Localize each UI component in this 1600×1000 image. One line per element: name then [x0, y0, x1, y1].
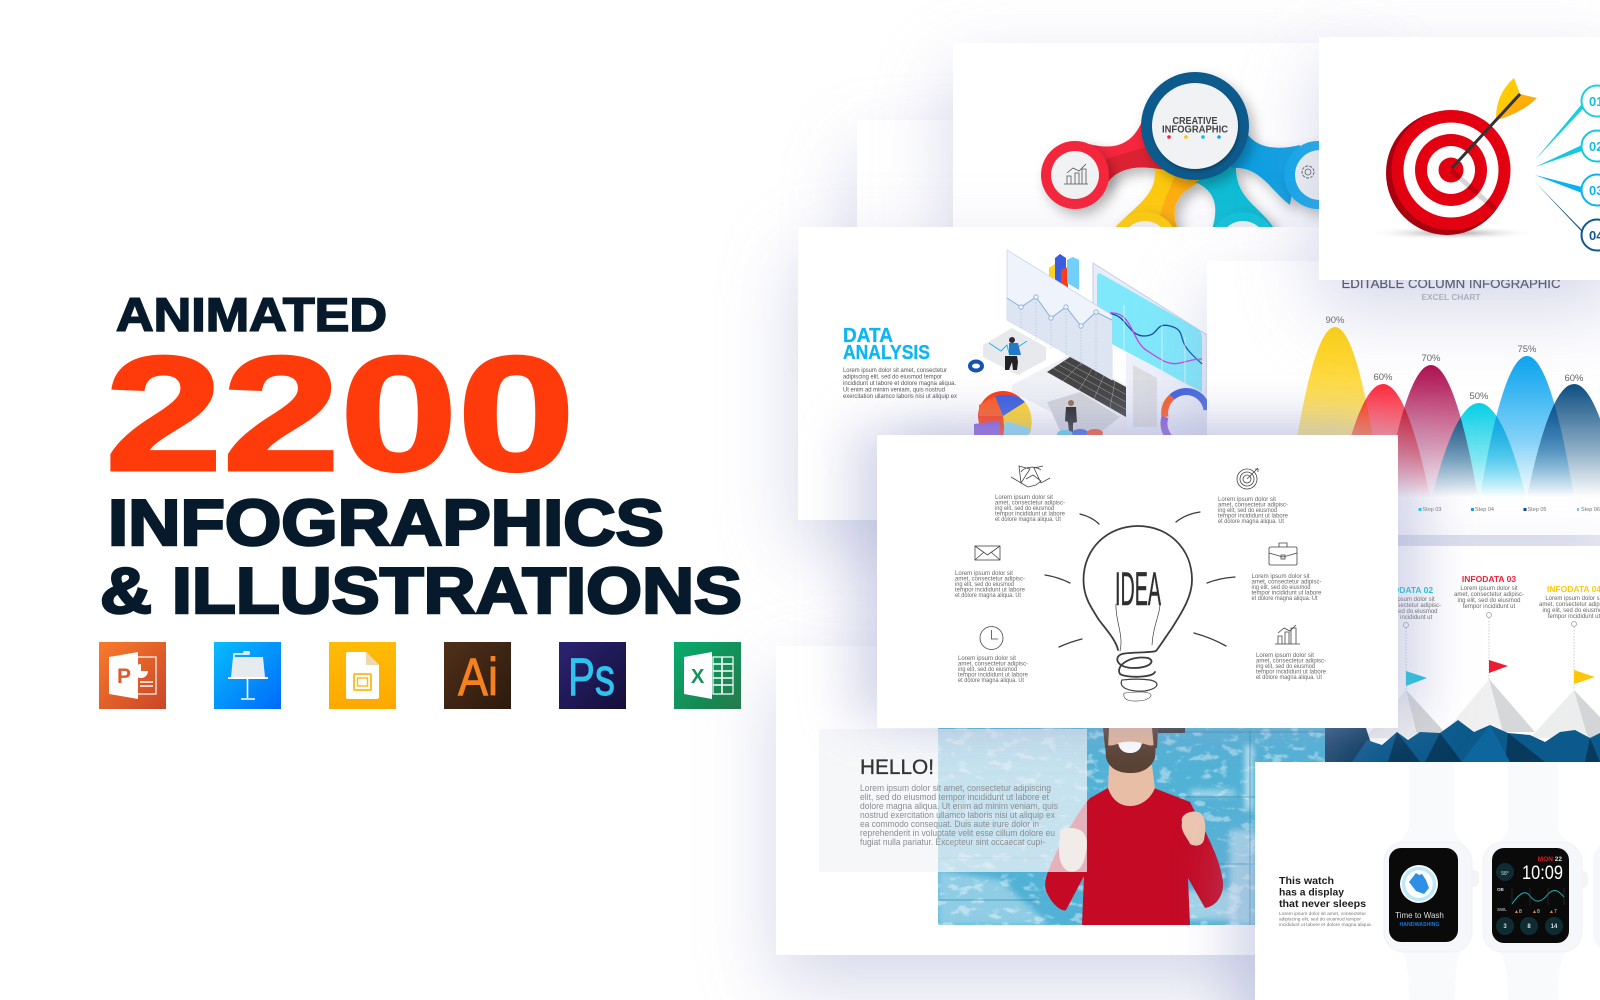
person on platform	[983, 328, 1046, 375]
percent labels	[1325, 315, 1584, 402]
text block: middle left: ing elit, sed do eiusmod	[955, 581, 1014, 588]
text block: middle right: Lorem ipsum dolor sit	[1252, 573, 1310, 580]
lobe: red chart	[1041, 141, 1109, 209]
lobe: cyan	[1210, 212, 1276, 278]
icon: handshake	[1011, 466, 1050, 487]
data analysis body text: Ut enim ad minim veniam, quis nostrud	[843, 388, 945, 394]
infodata 02: tempor incididunt ut	[1380, 615, 1433, 621]
text block: bottom left: tempor incididunt ut labore	[958, 672, 1028, 678]
watch 1: handwashing: Time to Wash	[1395, 911, 1444, 920]
center hub: INFOGRAPHIC	[1162, 124, 1228, 136]
watch heading	[1279, 875, 1366, 910]
target shadow	[1367, 226, 1537, 240]
text block: middle right: et dolore magna aliqua. Ut	[1252, 595, 1318, 602]
heading: 2200: 2200	[105, 322, 575, 505]
numbered branch 03	[1535, 174, 1600, 206]
translucent text card	[819, 729, 1087, 872]
chart title: EDITABLE COLUMN INFOGRAPHIC	[1342, 276, 1560, 291]
infodata 03: amet, consectetur adipisc-	[1454, 592, 1524, 598]
text block: bottom right: et dolore magna aliqua. Ut	[1256, 674, 1322, 681]
hello body text: ea commodo consequat. Duis aute irure dolor in	[860, 819, 1039, 829]
hello body text: nostrud exercitation ullamco laboris nisi ut aliquip ex	[860, 810, 1055, 820]
text block: bottom left: Lorem ipsum dolor sit	[958, 655, 1016, 662]
data analysis body text: Lorem ipsum dolor sit amet, consectetur	[843, 368, 947, 374]
text block: bottom left: amet, consectetur adipisc-	[958, 660, 1028, 668]
text block: top right: ing elit, sed do eiusmod	[1218, 507, 1277, 514]
man in suit	[1065, 400, 1077, 432]
panel: hello photo slide	[776, 646, 1325, 955]
text block: middle left: tempor incididunt ut labore	[955, 586, 1025, 594]
small spheres	[1057, 429, 1103, 438]
icon: illustrator	[444, 642, 511, 709]
text block: top right: amet, consectetur adipisc-	[1218, 502, 1288, 508]
text block: bottom right: tempor incididunt ut labore	[1256, 668, 1326, 676]
infodata 04	[1539, 584, 1600, 690]
numbered branch 02	[1535, 130, 1600, 167]
hero title and app icons	[99, 288, 742, 709]
data analysis body text: adipiscing elit, sed do eiusmod tempor	[843, 374, 942, 380]
watch heading: This watch	[1279, 875, 1334, 887]
watch 2: clock face: ▲7	[1549, 909, 1557, 915]
watch body text: incididunt ut labore et dolore magna aliqua.	[1279, 922, 1372, 928]
connector arms	[1085, 110, 1300, 230]
text block: top left: Lorem ipsum dolor sit	[995, 494, 1053, 501]
watch 2: clock face: 10:09	[1522, 862, 1563, 884]
step legend	[1418, 507, 1600, 513]
panel: data analysis	[798, 227, 1338, 520]
arrow	[1452, 78, 1537, 168]
hello body text	[860, 783, 1058, 847]
text block: bottom right: Lorem ipsum dolor sit	[1256, 652, 1314, 659]
text block: top left: et dolore magna aliqua. Ut	[995, 516, 1061, 523]
text block: middle left: amet, consectetur adipisc-	[955, 576, 1025, 582]
watch 2: clock face: OB	[1497, 887, 1505, 892]
lobe: yellow	[1112, 212, 1178, 278]
text block: middle right: ing elit, sed do eiusmod	[1252, 584, 1311, 591]
watch body text: adipiscing elit, sed do eiusmod tempor	[1279, 916, 1361, 922]
step legend: Step 04	[1475, 507, 1494, 513]
heading: infographics: INFOGRAPHICS	[108, 486, 664, 559]
icon: briefcase	[1269, 543, 1297, 565]
infodata 04: tempor incididunt ut	[1548, 614, 1600, 620]
text block: top left: ing elit, sed do eiusmod	[995, 505, 1054, 512]
icon: excel	[674, 642, 741, 709]
text block: top left	[995, 494, 1065, 523]
rays	[1045, 512, 1235, 647]
icon: photoshop: Ps	[568, 648, 615, 707]
percent labels: 70%	[1421, 353, 1441, 364]
text block: bottom left: et dolore magna aliqua. Ut	[958, 677, 1024, 684]
text block: top left: tempor incididunt ut labore	[995, 510, 1065, 518]
watch 2: clock face: ▲8	[1514, 909, 1522, 915]
watch body text: Lorem ipsum dolor sit amet, consectetur	[1279, 911, 1366, 917]
watch 2: clock face: 8	[1527, 924, 1531, 930]
step legend: Step 03	[1422, 507, 1441, 513]
document sheet	[1126, 352, 1207, 435]
watch 1: handwashing	[1384, 762, 1479, 1000]
isometric illustration	[970, 250, 1207, 441]
watch 2: clock face	[1483, 762, 1588, 1000]
infodata 02	[1371, 585, 1441, 690]
percent labels: 90%	[1325, 315, 1345, 326]
man	[1045, 728, 1223, 925]
text block: top right	[1218, 496, 1288, 525]
infodata 03: Lorem ipsum dolor sit	[1460, 586, 1518, 592]
watch 2: clock face: 58°	[1501, 871, 1509, 877]
text block: bottom right: amet, consectetur adipisc-	[1256, 658, 1326, 664]
panel: blank slide	[857, 120, 1057, 320]
infodata 03: INFODATA 03	[1462, 574, 1516, 584]
infodata 02: ing elit, sed do eiusmod	[1374, 609, 1438, 615]
numbered branch 01	[1535, 86, 1600, 160]
text block: top left: amet, consectetur adipisc-	[995, 500, 1065, 506]
percent labels: 60%	[1373, 372, 1393, 383]
text block: middle left: et dolore magna aliqua. Ut	[955, 592, 1021, 599]
text block: middle right	[1252, 573, 1322, 602]
bell chart	[1288, 327, 1600, 497]
light bulb	[1084, 526, 1192, 701]
panel: editable column infographic	[1207, 261, 1600, 535]
hello heading: HELLO!	[860, 756, 934, 779]
infodata 02: INFODATA 02	[1379, 585, 1433, 595]
icon: clock	[980, 626, 1003, 650]
laptop and keyboard	[1012, 355, 1126, 435]
center hub: CREATIVE	[1172, 115, 1218, 127]
numbered branch 04	[1534, 181, 1600, 250]
watch heading: that never sleeps	[1279, 898, 1366, 910]
text block: bottom left: ing elit, sed do eiusmod	[958, 666, 1017, 673]
pie chart	[974, 391, 1032, 441]
hello body text: reprehenderit in voluptate velit esse cillum dolore eu	[860, 828, 1055, 838]
icon: powerpoint	[99, 642, 166, 709]
icon: excel: X	[691, 666, 705, 688]
hello body text: elit, sed do eiusmod tempor incididunt ut labore et	[860, 792, 1049, 802]
watch heading: has a display	[1279, 886, 1344, 898]
watch body text	[1279, 911, 1372, 928]
left chart sheet	[1007, 250, 1112, 380]
text block: middle left	[955, 570, 1025, 599]
infodata 02: Lorem ipsum dolor sit	[1377, 597, 1435, 603]
infodata 04: INFODATA 04	[1547, 584, 1600, 594]
text block: bottom right	[1256, 652, 1326, 681]
panel: idea light bulb: IDEA	[1115, 562, 1161, 615]
donut chart	[1164, 392, 1207, 440]
center hub	[1141, 72, 1249, 180]
icon: envelope	[975, 546, 1000, 560]
infodata 03: tempor incididunt ut	[1463, 604, 1516, 610]
panel: creative infographic	[953, 43, 1373, 303]
panel: mountain flags timeline	[1280, 546, 1600, 762]
text block: top right: Lorem ipsum dolor sit	[1218, 496, 1276, 503]
snow peaks	[1365, 679, 1600, 738]
step legend: Step 06	[1581, 507, 1600, 513]
data analysis body text: exercitation ullamco laboris nisi ut aliquip ex	[843, 394, 957, 400]
text block: bottom left	[958, 655, 1028, 684]
text block: top right: tempor incididunt ut labore	[1218, 512, 1288, 520]
3d bars	[1049, 254, 1079, 297]
hello body text: Lorem ipsum dolor sit amet, consectetur adipiscing	[860, 783, 1051, 793]
photo of man	[938, 700, 1330, 925]
icon: powerpoint: P	[117, 665, 131, 688]
infodata 03	[1454, 574, 1524, 680]
watch 2: clock face: SWL	[1497, 907, 1507, 912]
text block: middle left: Lorem ipsum dolor sit	[955, 570, 1013, 577]
step legend: Step 05	[1528, 507, 1546, 513]
icon: chart	[1275, 625, 1300, 644]
heading: animated: ANIMATED	[116, 288, 387, 341]
data analysis body text: incididunt ut labore et dolore magna aliqua.	[843, 381, 956, 387]
chart subtitle: EXCEL CHART	[1422, 293, 1481, 302]
panel: smart watch	[1255, 762, 1600, 1000]
lobe: blue gear	[1284, 141, 1352, 209]
text block: middle right: tempor incididunt ut labore	[1252, 590, 1322, 596]
text block: bottom right: ing elit, sed do eiusmod	[1256, 663, 1315, 670]
data analysis heading	[843, 325, 930, 364]
watch 1: handwashing: HANDWASHING	[1400, 922, 1440, 928]
text block: middle right: amet, consectetur adipisc-	[1252, 578, 1322, 586]
right screen	[1093, 263, 1207, 396]
icon: target	[1237, 468, 1258, 489]
infodata 02: amet, consectetur adipisc-	[1371, 603, 1441, 609]
target	[1386, 110, 1510, 235]
blue mountain range	[1325, 720, 1600, 762]
heading: illustrations: & ILLUSTRATIONS	[100, 554, 742, 627]
icon: google slides	[329, 642, 396, 709]
watch 2: clock face: ▲8	[1532, 909, 1540, 915]
infodata 03: ing elit, sed do eiusmod	[1457, 598, 1521, 604]
data analysis body text	[843, 368, 957, 400]
data analysis heading: ANALYSIS	[843, 342, 930, 364]
panel: target and arrow	[1319, 37, 1600, 280]
icon: illustrator: Ai	[458, 648, 498, 707]
percent labels: 60%	[1564, 373, 1584, 384]
panel: idea light bulb	[877, 435, 1398, 728]
hello body text: dolore magna aliqua. Ut enim ad minim veniam, quis	[860, 801, 1058, 811]
text block: top right: et dolore magna aliqua. Ut	[1218, 518, 1284, 525]
data analysis heading: DATA	[843, 325, 893, 347]
watch 3: cropped edge	[1593, 842, 1600, 952]
gear	[970, 362, 982, 370]
watch 2: clock face: MON 22	[1538, 856, 1562, 863]
brick wall	[938, 728, 1325, 925]
icon: keynote	[214, 642, 281, 709]
percent labels: 75%	[1517, 344, 1537, 355]
percent labels: 50%	[1469, 391, 1489, 402]
hello body text: fugiat nulla pariatur. Excepteur sint occaecat cupi-	[860, 837, 1045, 847]
watch 2: clock face: 3	[1503, 924, 1507, 930]
watch 2: clock face: 14	[1551, 924, 1558, 930]
